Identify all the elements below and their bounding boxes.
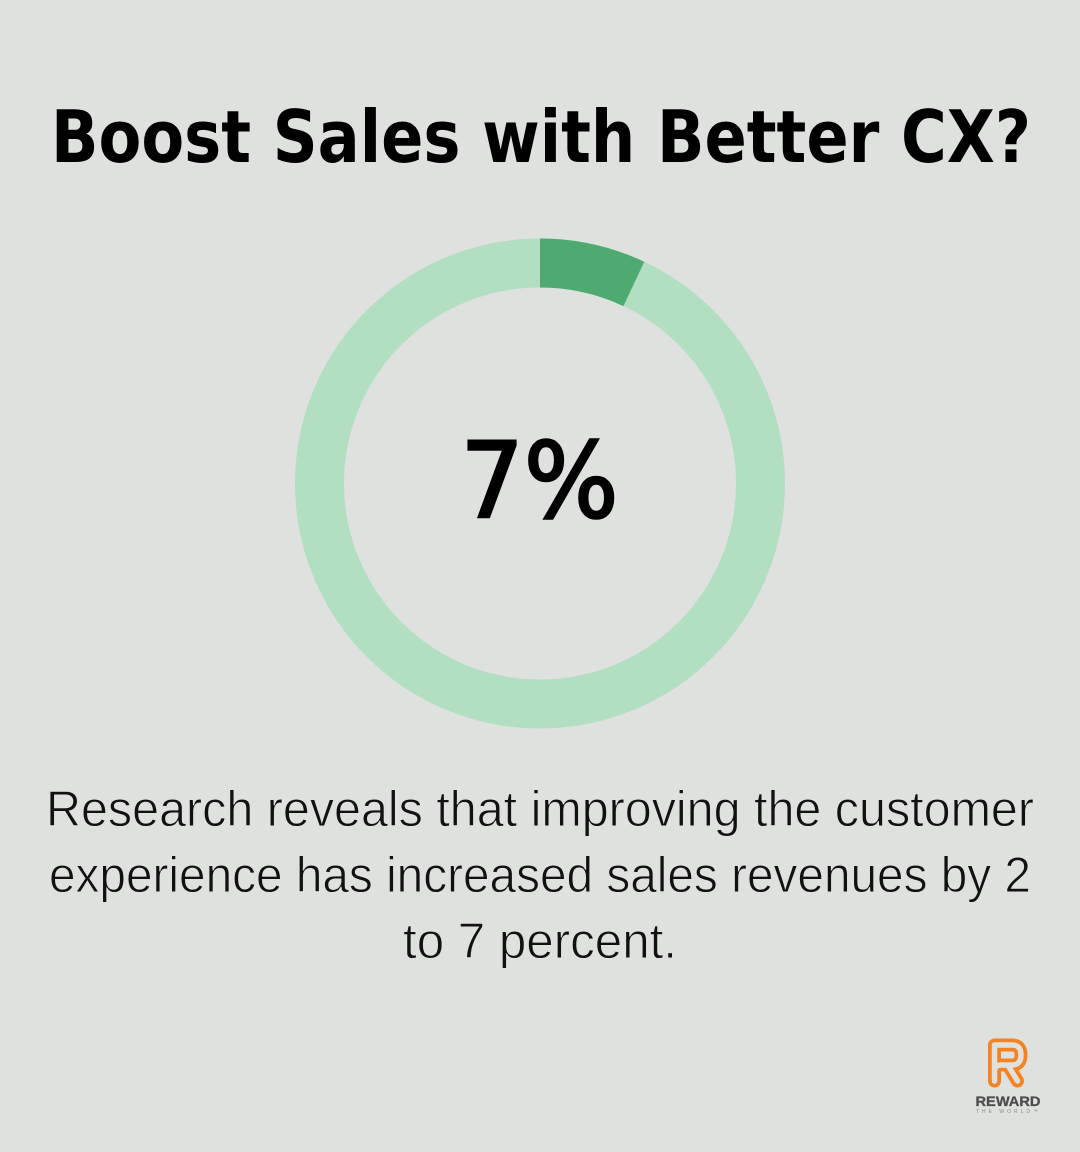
donut chart: 7 percent	[320, 238, 760, 704]
donut highlighted segment	[540, 238, 644, 306]
donut center value: 7%	[460, 420, 618, 542]
logo: Reward the World	[976, 1045, 1040, 1115]
description text: experience has increased sales revenues by 2	[49, 847, 1031, 903]
logo tagline: THE WORLD™	[976, 1109, 1038, 1115]
description text	[46, 781, 1034, 969]
description text: to 7 percent.	[403, 913, 677, 969]
description text: Research reveals that improving the customer	[46, 781, 1034, 837]
logo wordmark: REWARD	[976, 1093, 1040, 1109]
donut track	[320, 263, 760, 704]
icon: orange R mark	[994, 1045, 1021, 1081]
